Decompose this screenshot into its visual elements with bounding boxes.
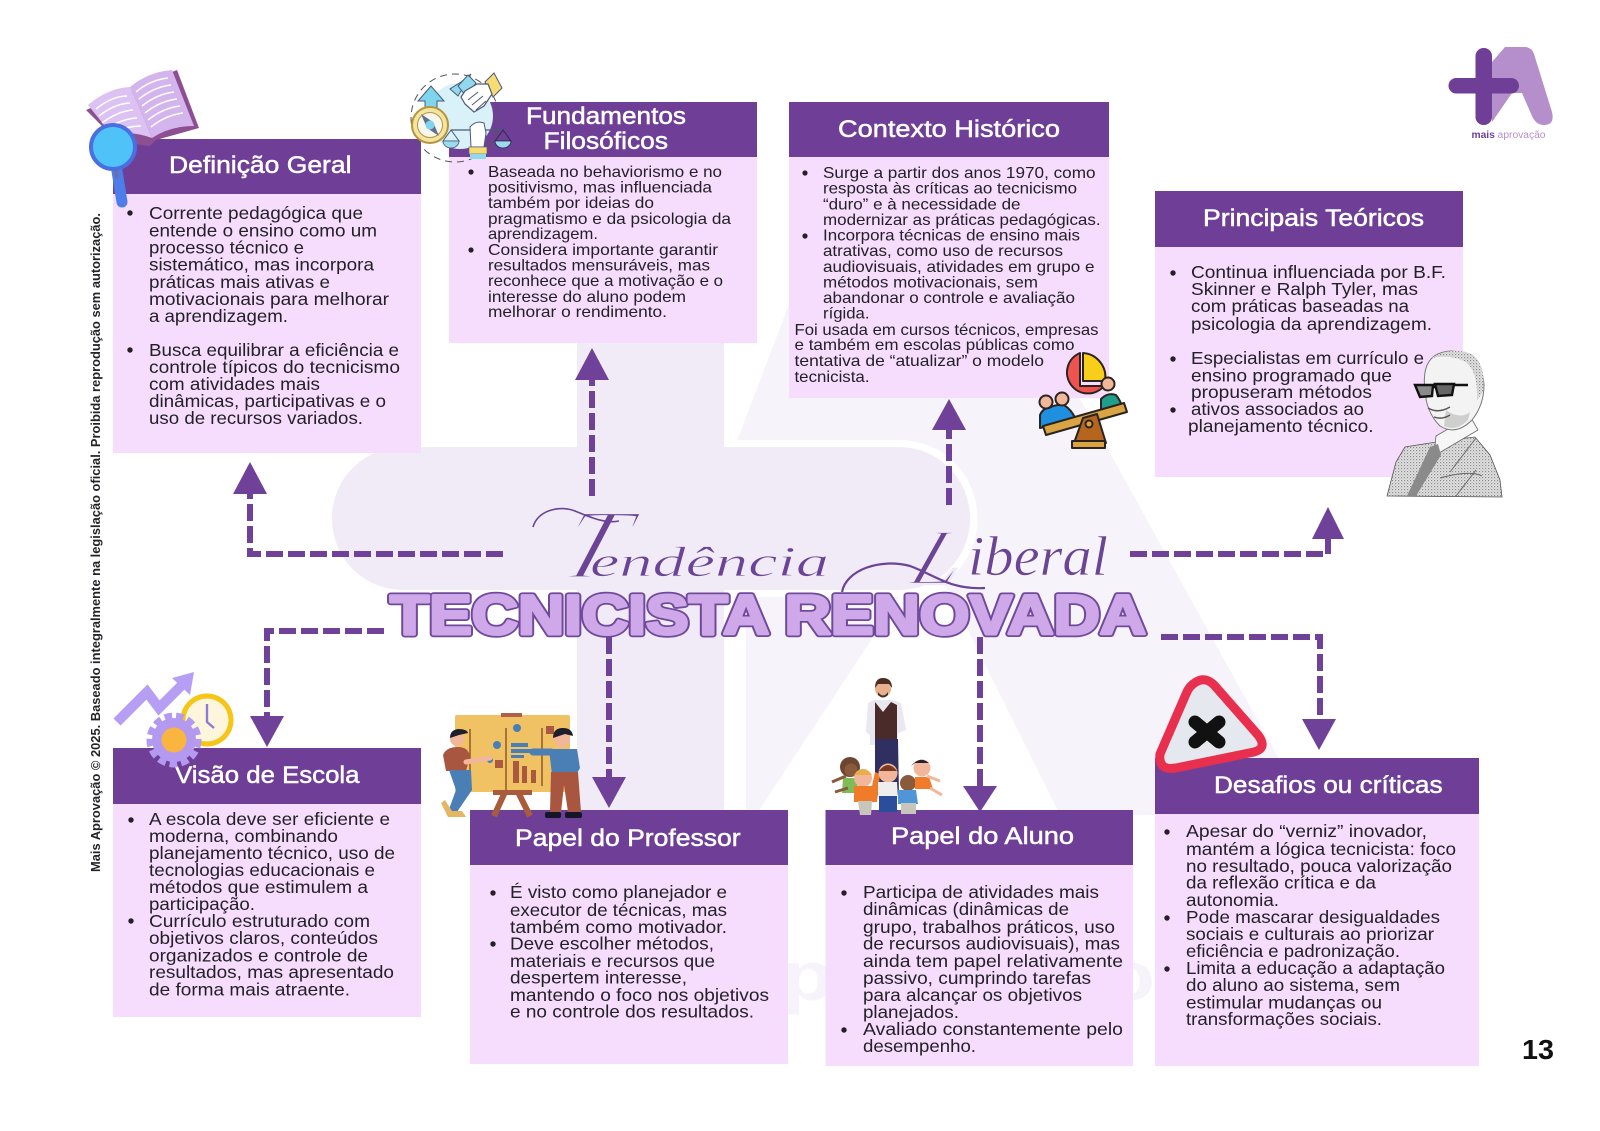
text: Definição Geral: controle típicos do tecnicismo	[149, 357, 400, 377]
text: Fundamentos Filosóficos: Considera importante garantir	[488, 242, 719, 259]
panel: Papel do Professor	[470, 810, 788, 1064]
heading: Papel do Professor: Papel do Professor	[515, 825, 741, 852]
text: Visão de Escola: tecnologias educacionais e	[149, 860, 375, 880]
title: TECNICISTA RENOVADA: TECNICISTA RENOVADA	[390, 583, 1146, 646]
text: Definição Geral: práticas mais ativas e	[149, 272, 330, 292]
text: Papel do Professor: executor de técnicas, mas	[510, 900, 727, 920]
text: Papel do Professor: materiais e recursos que	[510, 951, 715, 971]
text: Definição Geral: motivacionais para melhorar	[149, 289, 389, 309]
text: Fundamentos Filosóficos: também por ideias do	[488, 195, 654, 212]
text: Fundamentos Filosóficos: interesse do aluno podem	[488, 289, 686, 306]
text: Visão de Escola: participação.	[149, 894, 255, 914]
text: Papel do Aluno: de recursos audiovisuais), mas	[863, 934, 1120, 954]
text: Papel do Aluno: planejados.	[863, 1002, 959, 1022]
watermark logo: aprovação	[735, 937, 1155, 1015]
page number: 13	[1522, 1034, 1554, 1065]
arrow: to Principais Teóricos	[1130, 507, 1344, 554]
text: Fundamentos Filosóficos: resultados mensuráveis, mas	[488, 258, 710, 275]
icon: pie chart and seesaw	[1040, 353, 1127, 448]
text: Visão de Escola: resultados, mas apresentado	[149, 962, 394, 982]
text: Desafios ou críticas: transformações sociais.	[1186, 1009, 1382, 1029]
text: Papel do Aluno: Participa de atividades mais	[863, 882, 1099, 902]
children	[832, 757, 942, 815]
text: Papel do Aluno: passivo, cumprindo tarefas	[863, 968, 1091, 988]
text: Principais Teóricos: psicologia da aprendizagem.	[1191, 314, 1432, 334]
text: Visão de Escola: moderna, combinando	[149, 826, 338, 846]
text: Papel do Professor: mantendo o foco nos objetivos	[510, 985, 769, 1005]
text: Contexto Histórico: “duro” e à necessidade de	[823, 196, 1021, 213]
text: Contexto Histórico: modernizar as práticas pedagógicas.	[823, 212, 1101, 229]
heading: Contexto Histórico: Contexto Histórico	[838, 116, 1060, 143]
text: Definição Geral	[127, 203, 400, 428]
logo: mais aprovação	[1448, 47, 1553, 141]
text: Visão de Escola: A escola deve ser eficiente e	[149, 809, 390, 829]
text: Fundamentos Filosóficos: reconhece que a motivação e o	[488, 273, 723, 290]
text: Definição Geral: entende o ensino como um	[149, 220, 377, 240]
text: Principais Teóricos: Continua influenciada por B.F.	[1191, 262, 1446, 282]
icon: compass, handshake and scales	[411, 73, 511, 162]
heading: Fundamentos Filosóficos: Fundamentos	[526, 103, 686, 130]
text: Desafios ou críticas	[1164, 821, 1456, 1029]
text: Fundamentos Filosóficos: pragmatismo e da psicologia da	[488, 211, 731, 228]
icon: teachers at planning board	[441, 713, 582, 818]
text: Papel do Aluno: Avaliado constantemente pelo	[863, 1019, 1123, 1039]
text: Fundamentos Filosóficos	[468, 164, 731, 321]
text: Definição Geral: Corrente pedagógica que	[149, 203, 363, 223]
text: Contexto Histórico: Surge a partir dos anos 1970, como	[823, 165, 1096, 182]
text: Fundamentos Filosóficos: melhorar o rendimento.	[488, 304, 667, 321]
text: Papel do Aluno	[841, 882, 1123, 1056]
panel: Visão de Escola	[113, 748, 421, 1017]
title: TECNICISTA RENOVADA: TECNICISTA RENOVADA	[390, 583, 1146, 646]
text: Definição Geral: sistemático, mas incorpora	[149, 255, 374, 275]
arrow: to Fundamentos Filosóficos	[575, 348, 609, 496]
text: Principais Teóricos: planejamento técnico.	[1188, 416, 1374, 436]
arrow: to Visão de Escola	[250, 631, 384, 747]
text: Contexto Histórico: tentativa de “atualizar” o modelo	[794, 353, 1044, 370]
arrow: to Papel do Professor	[592, 637, 626, 808]
text: Contexto Histórico: métodos motivacionais, sem	[823, 274, 1038, 292]
text: Principais Teóricos: ativos associados ao	[1191, 399, 1364, 419]
text: Desafios ou críticas: do aluno ao sistema, sem	[1186, 975, 1400, 995]
text: Desafios ou críticas: eficiência e padronização.	[1186, 941, 1400, 961]
text: Principais Teóricos	[1170, 262, 1446, 436]
text: Contexto Histórico: audiovisuais, atividades em grupo e	[823, 259, 1095, 276]
text: Desafios ou críticas: sociais e culturais ao priorizar	[1186, 924, 1434, 944]
icon: teacher with children	[832, 678, 942, 815]
text: Definição Geral: a aprendizagem.	[149, 306, 288, 326]
text: Visão de Escola: objetivos claros, conteúdos	[149, 928, 378, 948]
panel: Fundamentos Filosóficos	[449, 102, 757, 343]
text: Contexto Histórico: Incorpora técnicas de ensino mais	[823, 228, 1080, 245]
text: Desafios ou críticas: mantém a lógica tecnicista: foco	[1186, 839, 1456, 859]
text: Contexto Histórico: e também em escolas públicas como	[794, 337, 1075, 354]
text: Fundamentos Filosóficos: Baseada no behaviorismo e no	[488, 164, 722, 181]
text: Visão de Escola: Currículo estruturado com	[149, 911, 370, 931]
right figure	[533, 728, 582, 818]
text: Definição Geral: com atividades mais	[149, 374, 320, 394]
text: Desafios ou críticas: da reflexão crítica e da	[1186, 872, 1376, 892]
text: Principais Teóricos: ensino programado que	[1191, 366, 1392, 386]
text: Desafios ou críticas: estimular mudanças ou	[1186, 992, 1382, 1012]
logo wordmark: mais aprovação	[1472, 130, 1546, 141]
panel: Contexto Histórico	[789, 102, 1109, 398]
title: Tendência Liberal: T	[545, 490, 650, 600]
text: Contexto Histórico: atrativas, como uso de recursos	[823, 243, 1063, 260]
text: Papel do Professor: e no controle dos resultados.	[510, 1002, 754, 1022]
text: Visão de Escola: planejamento técnico, uso de	[149, 843, 395, 863]
text: Definição Geral: dinâmicas, participativas e o	[149, 391, 386, 411]
text: Visão de Escola	[128, 809, 395, 1000]
heading: Visão de Escola: Visão de Escola	[175, 762, 360, 789]
text: Papel do Professor: despertem interesse,	[510, 968, 687, 988]
arrow: to Desafios ou críticas	[1161, 637, 1336, 750]
text: Papel do Aluno: para alcançar os objetivos	[863, 985, 1082, 1005]
text: Contexto Histórico	[794, 165, 1101, 386]
text: Principais Teóricos: com práticas baseadas na	[1191, 296, 1409, 316]
title: Tendência Liberal: iberal	[968, 526, 1108, 588]
title: Tendência Liberal: L	[898, 512, 981, 601]
title: Tendência Liberal	[533, 490, 1108, 601]
text: Fundamentos Filosóficos: positivismo, mas influenciada	[488, 180, 712, 197]
panel: Desafios ou críticas	[1155, 758, 1479, 1066]
heading: Papel do Aluno: Papel do Aluno	[891, 823, 1074, 850]
left figure	[441, 729, 490, 817]
panel: Definição Geral	[113, 139, 421, 453]
text: Papel do Aluno: ainda tem papel relativamente	[863, 951, 1123, 971]
text: Papel do Aluno: dinâmicas (dinâmicas de	[863, 899, 1069, 919]
text: Contexto Histórico: Foi usada em cursos técnicos, empresas	[794, 322, 1098, 339]
arrow: to Contexto Histórico	[932, 399, 966, 505]
text: Visão de Escola: organizados e controle de	[149, 946, 368, 966]
text: Visão de Escola: de forma mais atraente.	[149, 980, 350, 1000]
watermark logo	[332, 299, 1310, 1015]
text: Desafios ou críticas: Limita a educação a adaptação	[1186, 958, 1445, 978]
text: Definição Geral: processo técnico e	[149, 238, 304, 258]
arrow: to Definição Geral	[233, 462, 503, 554]
text: Papel do Professor: É visto como planejador e	[510, 882, 727, 902]
heading: Definição Geral: Definição Geral	[169, 152, 352, 179]
icon: portrait of B.F. Skinner	[1387, 351, 1502, 497]
panel: Principais Teóricos	[1155, 191, 1463, 477]
heading: Principais Teóricos: Principais Teóricos	[1203, 205, 1424, 232]
text: Papel do Aluno: grupo, trabalhos práticos, uso	[863, 917, 1115, 937]
text: Contexto Histórico: resposta às críticas ao tecnicismo	[823, 181, 1077, 198]
text: Desafios ou críticas: no resultado, pouca valorização	[1186, 856, 1452, 876]
text: Principais Teóricos: propuseram métodos	[1191, 382, 1372, 402]
copyright notice: Mais Aprovação © 2025. Baseado integralmente na legislação oficial. Proibida reprodução sem autorização.	[89, 213, 103, 872]
text: Principais Teóricos: Especialistas em currículo e	[1191, 348, 1424, 368]
icon: open book with magnifier	[86, 70, 199, 202]
text: Definição Geral: uso de recursos variados.	[149, 408, 363, 428]
icon: warning triangle with X	[1160, 680, 1262, 768]
text: Papel do Professor	[490, 882, 769, 1022]
text: Desafios ou críticas: Pode mascarar desigualdades	[1186, 907, 1440, 927]
text: Definição Geral: Busca equilibrar a eficiência e	[149, 340, 399, 360]
text: Visão de Escola: métodos que estimulem a	[149, 877, 368, 897]
heading: Desafios ou críticas: Desafios ou críticas	[1214, 772, 1443, 799]
text: Fundamentos Filosóficos: aprendizagem.	[488, 226, 598, 243]
heading: Fundamentos Filosóficos: Filosóficos	[544, 128, 668, 155]
text: Desafios ou críticas: Apesar do “verniz” inovador,	[1186, 821, 1427, 841]
text: Papel do Professor: também como motivador.	[510, 917, 727, 937]
text: Desafios ou críticas: autonomia.	[1186, 890, 1279, 910]
text: Contexto Histórico: tecnicista.	[794, 369, 870, 386]
text: Contexto Histórico: abandonar o controle e avaliação	[823, 290, 1075, 307]
heading: Fundamentos Filosóficos	[526, 103, 686, 155]
text: Papel do Professor: Deve escolher métodos,	[510, 934, 714, 954]
arrow: to Papel do Aluno	[963, 637, 997, 812]
text: Papel do Aluno: desempenho.	[863, 1036, 976, 1056]
text: Principais Teóricos: Skinner e Ralph Tyler, mas	[1191, 279, 1418, 299]
icon: growth arrow, clock and gear	[117, 672, 231, 764]
text: Contexto Histórico: rígida.	[823, 306, 870, 323]
panel: Papel do Aluno	[826, 810, 1133, 1066]
title: Tendência Liberal: endência	[590, 540, 829, 586]
